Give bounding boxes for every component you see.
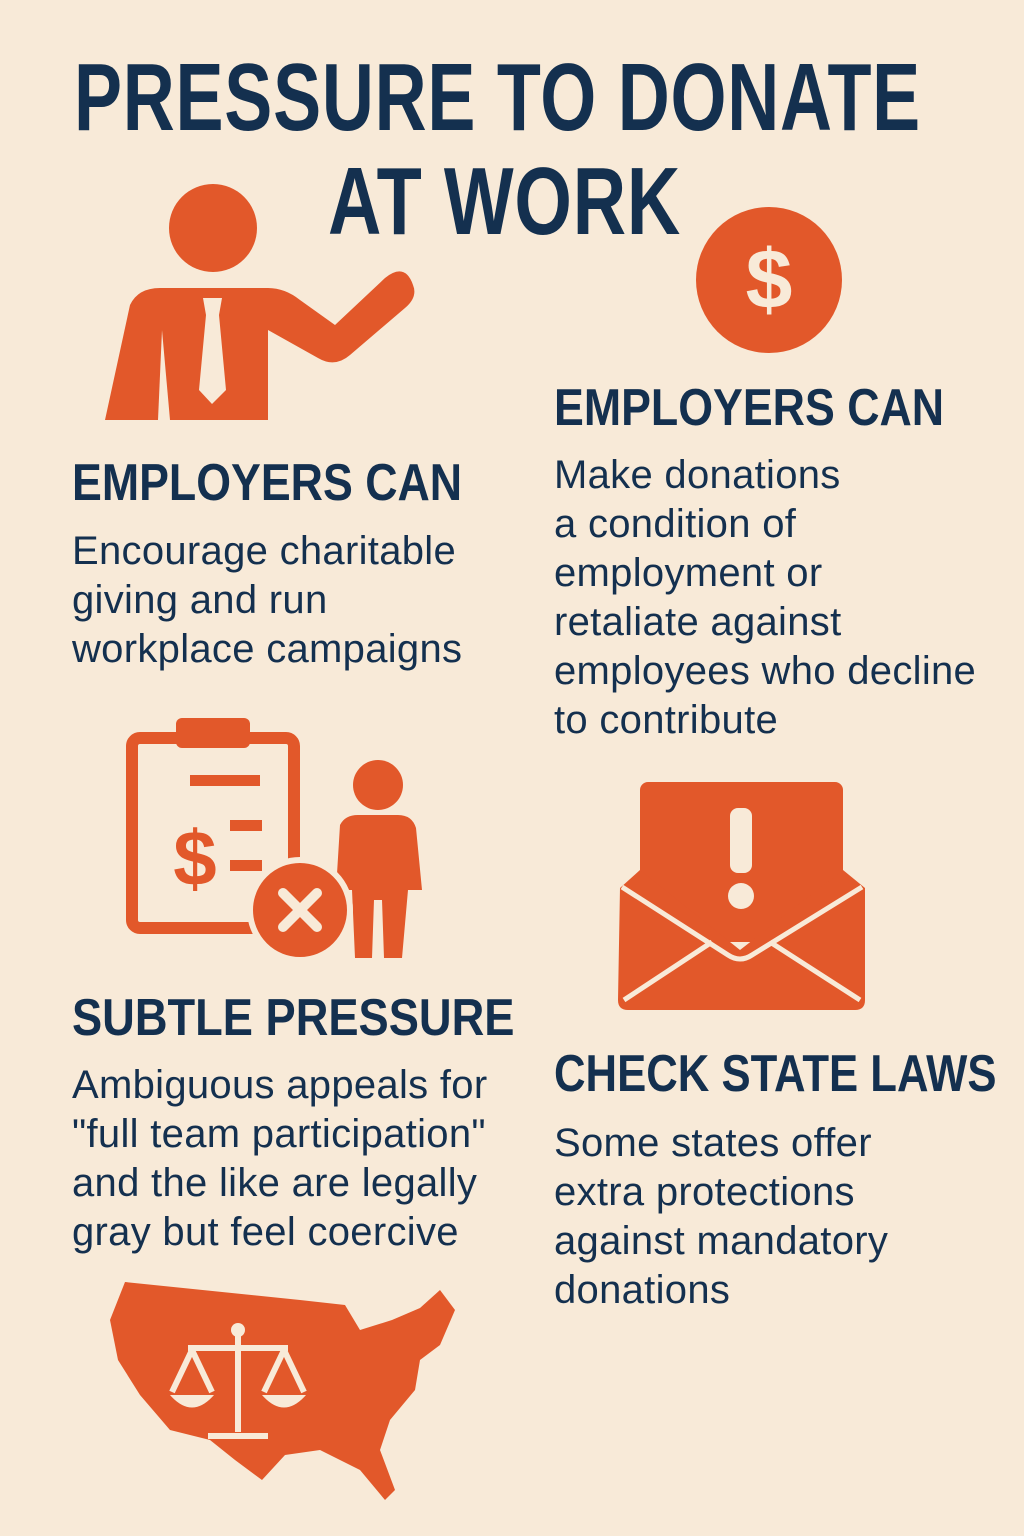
text block: giving and run	[72, 578, 328, 622]
heading: EMPLOYERS CAN	[554, 379, 944, 437]
heading: EMPLOYERS CAN	[72, 454, 462, 512]
icon: envelope with alert	[618, 782, 865, 1010]
heading: CHECK STATE LAWS	[554, 1045, 996, 1103]
icon: dollar coin: $	[746, 232, 792, 326]
text block	[72, 1063, 487, 1254]
panel: employers can encourage	[72, 454, 462, 671]
text block: Encourage charitable	[72, 529, 456, 573]
panel: subtle pressure	[72, 989, 514, 1254]
icon: clipboard with person and x: $	[173, 814, 217, 902]
text block: and the like are legally	[72, 1161, 477, 1205]
text block: Some states offer	[554, 1121, 872, 1165]
icon: clipboard with person and x	[126, 718, 422, 958]
text block: against mandatory	[554, 1219, 888, 1263]
text block: Make donations	[554, 453, 841, 497]
text block: retaliate against	[554, 600, 842, 644]
text block: employment or	[554, 551, 822, 595]
heading: SUBTLE PRESSURE	[72, 989, 514, 1047]
panel: employers can make condition	[554, 379, 976, 742]
text block: "full team participation"	[72, 1112, 486, 1156]
text block: Ambiguous appeals for	[72, 1063, 487, 1107]
icon: person pointing	[105, 184, 414, 420]
text block	[554, 453, 976, 742]
text block: extra protections	[554, 1170, 855, 1214]
icon: dollar coin	[696, 207, 842, 353]
icon: US map with scales	[110, 1282, 455, 1500]
title: AT WORK	[328, 148, 681, 255]
text block	[72, 529, 462, 671]
text block: donations	[554, 1268, 730, 1312]
text block	[554, 1121, 888, 1312]
text block: a condition of	[554, 502, 796, 546]
text block: gray but feel coercive	[72, 1210, 459, 1254]
panel: check state laws	[554, 1045, 996, 1312]
text block: employees who decline	[554, 649, 976, 693]
text block: to contribute	[554, 698, 778, 742]
title: PRESSURE TO DONATE	[74, 44, 921, 151]
text block: workplace campaigns	[72, 627, 462, 671]
title	[74, 44, 921, 255]
